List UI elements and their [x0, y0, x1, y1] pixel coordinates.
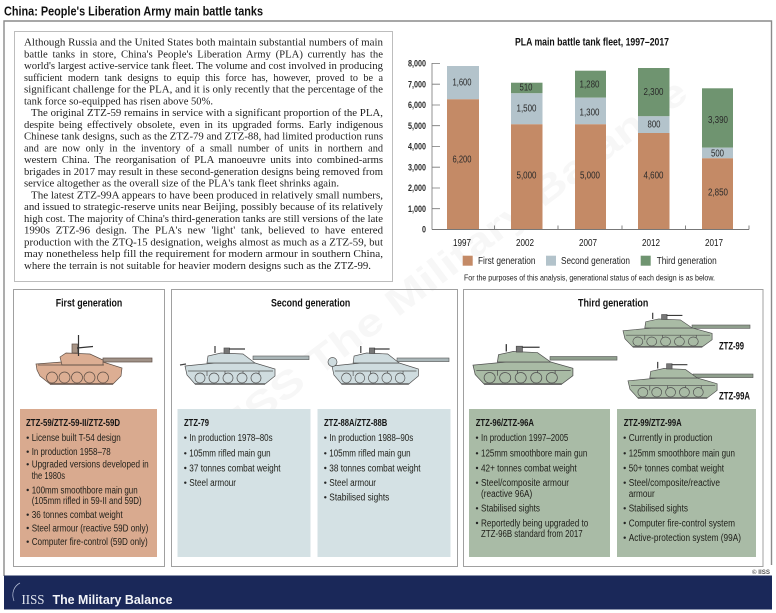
- info box: ZTZ-96: Reportedly being upgraded to: [481, 518, 589, 529]
- info box: ZTZ-96: Stabilised sights: [481, 504, 540, 515]
- bar 2002: [511, 83, 542, 230]
- panel: introductory text: production with the ZTQ-15 designation, weighs almost as much as a ZTZ-59, but: [24, 238, 383, 248]
- info box: ZTZ-99: Computer fire-control system: [629, 518, 735, 529]
- info box: ZTZ-88: In production 1988–90s: [329, 433, 413, 444]
- info box: ZTZ-96: In production 1997–2005: [481, 433, 569, 444]
- panel: introductory text: sufficient modern tank designs to equip this force has, however, proved to be a: [24, 73, 383, 84]
- panel: introductory text: world's largest active-service tank fleet. The volume and cost involved in producing: [24, 61, 384, 72]
- panel: introductory text: [14, 32, 392, 282]
- panel: introductory text: The original ZTZ-59 remains in service with a significant proportion of the PLA,: [31, 108, 383, 119]
- chart note: For the purposes of this analysis, generational status of each design is as below.: [464, 273, 715, 283]
- panel: introductory text: service altogether as the overall size of the PLA's tank fleet shrinks again.: [24, 179, 339, 190]
- panel: introductory text: western China. The reorganisation of PLA manoeuvre units into combined-arms: [24, 155, 383, 166]
- bar 2017: 3,390: [708, 115, 728, 126]
- panel: first generation: [14, 290, 164, 566]
- x axis: 2007: [579, 238, 597, 249]
- legend: [463, 256, 717, 267]
- info box: ZTZ-59: Steel armour (reactive 59D only): [32, 523, 148, 534]
- banner title: The Military Balance: [52, 592, 172, 607]
- logo: IISS: IISS: [22, 592, 44, 607]
- bar 2007: 1,280: [580, 80, 600, 91]
- bars: [447, 66, 733, 230]
- info box: ZTZ-59: ZTZ-59/ZTZ-59-II/ZTZ-59D: [26, 418, 120, 429]
- info box: ZTZ-99: Steel/composite/reactive: [629, 478, 720, 489]
- info box: ZTZ-88: [318, 409, 450, 557]
- panel: introductory text: where the terrain is not suitable for heavier modern designs such as the ZTZ-99.: [24, 261, 371, 272]
- bar 2012: 800: [648, 120, 661, 131]
- panel: introductory text: The latest ZTZ-99A appears to have been produced in relatively small numbers,: [31, 190, 383, 202]
- stacked bar chart: PLA fleet: [408, 36, 749, 283]
- info box: ZTZ-88: ZTZ-88A/ZTZ-88B: [324, 418, 387, 429]
- info box: ZTZ-96: ZTZ-96B standard from 2017: [481, 529, 583, 540]
- info box: ZTZ-79: 105mm rifled main gun: [189, 449, 271, 460]
- bar 2007: 5,000: [580, 170, 600, 181]
- info box: ZTZ-88: 38 tonnes combat weight: [329, 463, 421, 474]
- legend: Third generation: [657, 256, 717, 267]
- info box: ZTZ-99: armour: [629, 489, 655, 500]
- y axis: 1,000: [408, 204, 426, 214]
- x axis: 1997: [453, 238, 471, 249]
- panel: third generation: [464, 290, 763, 566]
- info box: ZTZ-99: 50+ tonnes combat weight: [629, 463, 724, 474]
- info box: ZTZ-79: ZTZ-79: [184, 418, 209, 429]
- y axis: 6,000: [408, 100, 426, 110]
- info box: ZTZ-99: Active-protection system (99A): [629, 533, 741, 544]
- legend: First generation: [478, 256, 536, 267]
- info box: ZTZ-96: [469, 409, 610, 557]
- x axis: 2002: [516, 238, 534, 249]
- panel: introductory text: significant challenge for the PLA, and it is only recently that the percentage of the: [24, 85, 383, 96]
- x axis: 2012: [642, 238, 660, 249]
- heading: first generation: First generation: [56, 298, 123, 310]
- info box: ZTZ-59: License built T-54 design: [32, 433, 121, 444]
- bar 2012: 4,600: [644, 170, 664, 181]
- y axis: 0: [422, 225, 426, 235]
- y axis: 4,000: [408, 142, 426, 152]
- info box: ZTZ-79: 37 tonnes combat weight: [189, 463, 281, 474]
- info box: ZTZ-79: Steel armour: [189, 478, 237, 489]
- panel: introductory text: Chinese tank designs, such as the ZTZ-79 and ZTZ-88, had limited production runs: [24, 132, 383, 143]
- y axis: 3,000: [408, 162, 426, 172]
- panel: introductory text: 1990s ZTZ-96 design. The PLA's new 'light' tank, believed to have entered: [24, 226, 384, 237]
- icon: ZTZ-88 tank: [328, 346, 449, 384]
- panel: introductory text: battle tanks in store, China's People's Liberation Army (PLA) currently has the: [24, 50, 383, 60]
- panel: introductory text: brigades in 2017 may result in these second-generation designs being removed from: [24, 167, 384, 178]
- info box: ZTZ-96: ZTZ-96/ZTZ-96A: [476, 418, 534, 429]
- icon: ZTZ-99 tank: [623, 313, 750, 347]
- bar 2007: [575, 71, 606, 230]
- title: China: People's Liberation Army main battle tanks: [4, 4, 263, 18]
- bar 2002: 1,500: [516, 104, 537, 115]
- info box: ZTZ-59: In production 1958–78: [32, 447, 111, 458]
- info box: ZTZ-88: Steel armour: [329, 478, 377, 489]
- y axis: [408, 59, 440, 235]
- y axis: 2,000: [408, 183, 426, 193]
- bar 1997: 1,600: [452, 78, 472, 89]
- copyright: © IISS: [752, 569, 770, 576]
- icon: ZTZ-79 tank: [180, 346, 309, 384]
- panel: introductory text: tank force so-equipped has risen above 50%.: [24, 96, 213, 108]
- y axis: 8,000: [408, 59, 426, 69]
- bar 2002: 510: [520, 83, 533, 94]
- bar 2017: 2,850: [708, 188, 728, 199]
- heading: third generation: Third generation: [578, 298, 649, 310]
- info box: ZTZ-79: [178, 409, 310, 557]
- panel: introductory text: despite being effectively obsolete, even in its upgraded forms. Early indigenous: [24, 120, 383, 131]
- info box: ZTZ-96: 42+ tonnes combat weight: [481, 463, 577, 474]
- info box: ZTZ-99: Currently in production: [629, 433, 712, 444]
- y axis: 7,000: [408, 79, 426, 89]
- info box: ZTZ-59: 100mm smoothbore main gun: [32, 485, 138, 496]
- info box: ZTZ-59: the 1980s: [32, 471, 65, 482]
- watermark: IISS The Military Balance: [215, 71, 696, 447]
- bar 1997: [447, 66, 479, 230]
- x axis: [432, 226, 749, 249]
- panel: introductory text: may nonetheless help fill the requirement for modern armour in southern China,: [24, 249, 383, 260]
- info box: ZTZ-59: (105mm rifled in 59-II and 59D): [32, 496, 142, 507]
- info box: ZTZ-88: Stabilised sights: [329, 493, 389, 504]
- panel: introductory text: Although Russia and the United States both maintain substantial numbers of main: [24, 38, 384, 49]
- legend: Second generation: [561, 256, 630, 267]
- icon: ZTZ-99A tank: [628, 362, 753, 398]
- info box: ZTZ-59: 36 tonnes combat weight: [32, 510, 123, 521]
- label: ZTZ-99A: ZTZ-99A: [719, 391, 750, 403]
- info box: ZTZ-96: 125mm smoothbore main gun: [481, 449, 587, 460]
- info box: ZTZ-96: (reactive 96A): [481, 489, 532, 500]
- info box: ZTZ-79: In production 1978–80s: [189, 433, 273, 444]
- icon: ZTZ-59 tank: [36, 335, 152, 384]
- info box: ZTZ-99: 125mm smoothbore main gun: [629, 449, 735, 460]
- bar 1997: 6,200: [452, 155, 472, 166]
- info box: ZTZ-99: ZTZ-99/ZTZ-99A: [624, 418, 682, 429]
- label: ZTZ-99: ZTZ-99: [719, 341, 744, 353]
- info box: ZTZ-99: [617, 409, 756, 557]
- y axis: 5,000: [408, 121, 426, 131]
- bar 2017: 500: [711, 149, 724, 160]
- chart title: PLA main battle tank fleet, 1997–2017: [515, 36, 669, 48]
- panel: second generation: [172, 290, 458, 566]
- bar 2007: 1,300: [580, 108, 600, 119]
- info box: ZTZ-96: Steel/composite armour: [481, 478, 570, 489]
- logo: IISS: [13, 583, 44, 607]
- bar 2012: [638, 68, 670, 230]
- info box: ZTZ-59: [20, 409, 157, 557]
- icon: ZTZ-96 tank: [473, 344, 617, 384]
- bar 2017: [702, 88, 733, 230]
- heading: second generation: Second generation: [271, 298, 351, 310]
- info box: ZTZ-99: Stabilised sights: [629, 504, 688, 515]
- footer banner: [4, 576, 772, 610]
- info box: ZTZ-59: Upgraded versions developed in: [32, 460, 149, 471]
- info box: ZTZ-88: 105mm rifled main gun: [329, 449, 411, 460]
- panel: introductory text: and issued to strategic-reserve units near Beijing, possibly because of its relatively: [24, 202, 384, 213]
- x axis: 2017: [705, 238, 723, 249]
- bar 2012: 2,300: [644, 87, 664, 98]
- panel: introductory text: high cost. The majority of China's third-generation tanks are still versions of the late: [24, 214, 383, 225]
- panel: introductory text: and are now only in the inventory of a small number of units in northern and: [24, 144, 384, 154]
- bar 2002: 5,000: [516, 170, 537, 181]
- info box: ZTZ-59: Computer fire-control (59D only): [32, 537, 148, 548]
